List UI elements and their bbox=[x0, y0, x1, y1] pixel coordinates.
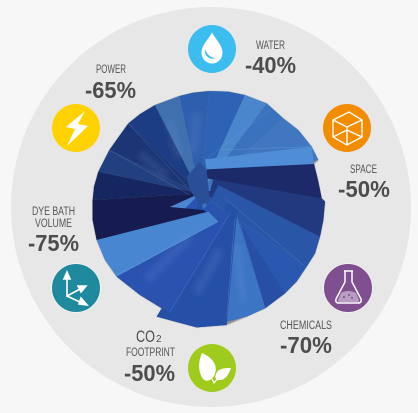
dye bath volume metric bbox=[28, 206, 100, 312]
icon: cube bbox=[323, 104, 371, 152]
icon: leaves bbox=[188, 344, 236, 392]
value: water: -40% bbox=[245, 52, 296, 78]
label: water: WATER bbox=[256, 40, 285, 52]
value: dye bath: -75% bbox=[28, 230, 79, 256]
icon: flask bbox=[324, 264, 372, 312]
label: space: SPACE bbox=[350, 164, 377, 176]
label: CO2: CO bbox=[136, 327, 155, 346]
swatch wedges bbox=[128, 105, 200, 193]
label: power: POWER bbox=[96, 64, 126, 76]
icon: lightning bolt bbox=[52, 104, 100, 152]
value: power: -65% bbox=[85, 77, 136, 103]
denim fade streaks bbox=[140, 113, 243, 303]
swatch centre knot bbox=[187, 162, 210, 205]
chemicals metric bbox=[280, 264, 372, 358]
space metric bbox=[323, 104, 390, 202]
label: footprint: FOOTPRINT bbox=[126, 347, 175, 359]
CO2 footprint metric bbox=[124, 327, 236, 392]
label: volume: VOLUME bbox=[35, 218, 72, 230]
swatch overlays bbox=[205, 147, 314, 170]
value: space: -50% bbox=[338, 176, 390, 202]
swatch seams bbox=[109, 110, 310, 317]
label: dye bath: DYE BATH bbox=[32, 206, 75, 218]
icon: water drop bbox=[188, 25, 236, 73]
icon: axes bbox=[52, 264, 100, 312]
value: chemicals: -70% bbox=[280, 332, 332, 358]
label: CO2 subscript: 2 bbox=[156, 334, 162, 345]
power metric bbox=[52, 64, 136, 152]
value: footprint: -50% bbox=[124, 360, 175, 386]
water metric bbox=[188, 25, 296, 78]
label: chemicals: CHEMICALS bbox=[280, 320, 332, 332]
denim fabric swatch wheel bbox=[93, 91, 325, 327]
